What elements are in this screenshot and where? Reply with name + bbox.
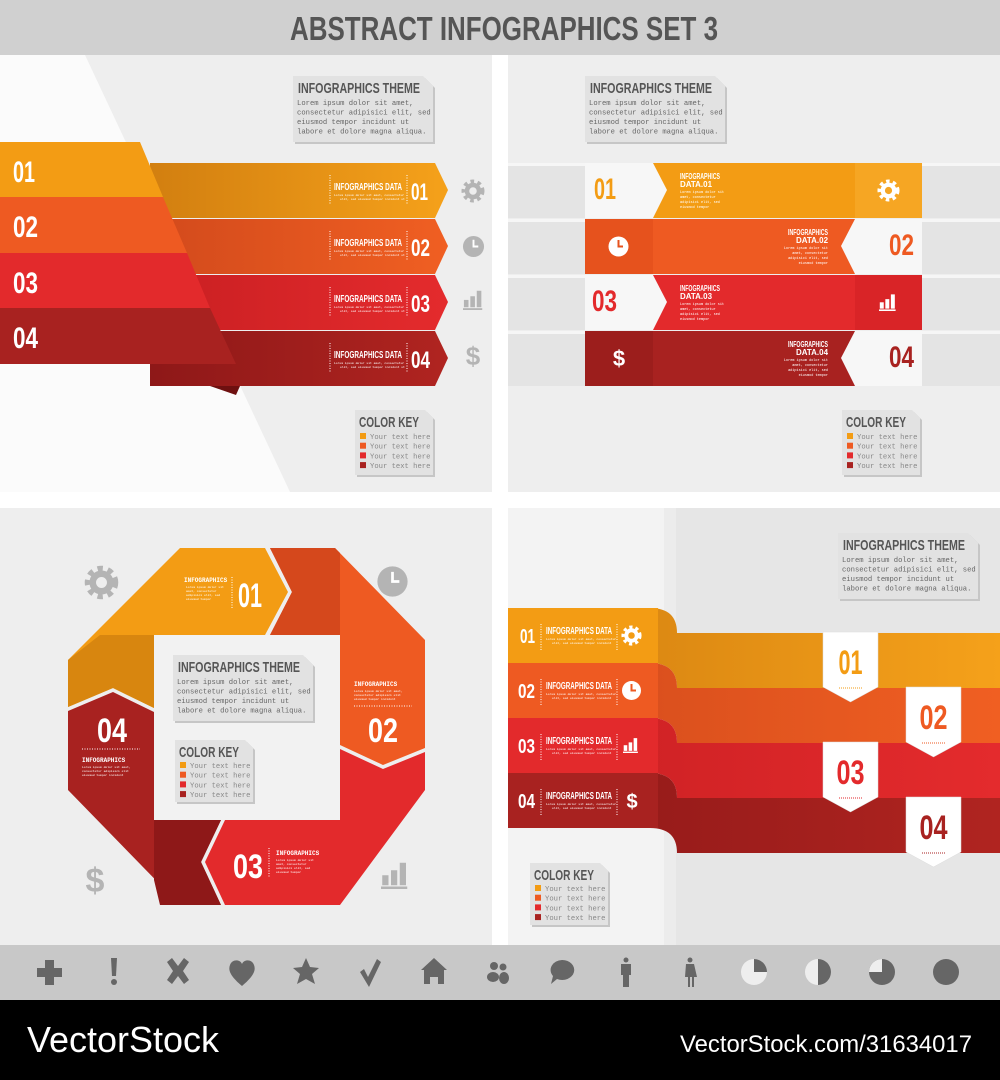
panel: top-right rows bbox=[508, 55, 1000, 492]
data labels: elit, sed eiusmod tempor incidunt ut bbox=[340, 253, 405, 257]
band labels: elit, sed eiusmod tempor incidunt bbox=[552, 751, 612, 755]
theme box: labore et dolore magna aliqua. bbox=[842, 586, 971, 594]
row 02: 02 bbox=[889, 229, 914, 262]
row 01: Lorem ipsum dolor sit bbox=[680, 190, 724, 195]
footer bbox=[0, 1000, 1000, 1080]
color key: Your text here bbox=[545, 886, 605, 894]
theme box: consectetur adipisici elit, sed bbox=[297, 110, 431, 118]
band labels: 02 bbox=[518, 681, 535, 703]
color key: Your text here bbox=[190, 773, 250, 781]
ribbon bands bbox=[508, 608, 1000, 853]
data labels: 02 bbox=[411, 235, 430, 262]
band labels: $ bbox=[626, 791, 638, 813]
segment 03: amet, consectetur bbox=[276, 863, 307, 866]
color key bbox=[355, 410, 435, 477]
color key: COLOR KEY bbox=[534, 867, 594, 884]
theme box: Lorem ipsum dolor sit amet, bbox=[589, 100, 705, 108]
row 01: DATA.01 bbox=[680, 180, 713, 189]
color key: Your text here bbox=[857, 463, 917, 471]
color key: Your text here bbox=[857, 453, 917, 461]
data labels: elit, sed eiusmod tempor incidunt ut bbox=[340, 365, 405, 369]
left bands: 01 bbox=[13, 156, 35, 189]
band labels: INFOGRAPHICS DATA bbox=[546, 626, 612, 637]
row 02 bbox=[585, 219, 922, 274]
band labels: INFOGRAPHICS DATA bbox=[546, 791, 612, 802]
row 01: 01 bbox=[594, 173, 616, 206]
corner icons: $ bbox=[86, 862, 105, 900]
tags: 02 bbox=[920, 699, 948, 737]
theme box: consectetur adipisici elit, sed bbox=[177, 688, 311, 696]
segment 04: 04 bbox=[97, 712, 127, 750]
segment 02: INFOGRAPHICS bbox=[354, 681, 398, 688]
segment 02: Lorem ipsum dolor sit amet, bbox=[354, 689, 403, 693]
panel: bottom-left octagon bbox=[0, 508, 492, 945]
theme box: Lorem ipsum dolor sit amet, bbox=[842, 557, 958, 565]
pie icons bbox=[741, 959, 959, 985]
color key: Your text here bbox=[190, 792, 250, 800]
row 03: eiusmod tempor bbox=[680, 317, 709, 322]
segment 02: 02 bbox=[368, 712, 398, 750]
theme box bbox=[585, 76, 727, 144]
icon: clock bbox=[608, 236, 628, 256]
segment 02: eiusmod tempor incidunt bbox=[354, 697, 396, 701]
band labels: 03 bbox=[518, 736, 535, 758]
row 01: adipisici elit, sed bbox=[680, 200, 720, 205]
row 01: INFOGRAPHICS bbox=[680, 172, 720, 181]
color key: COLOR KEY bbox=[359, 414, 419, 431]
segment 04: INFOGRAPHICS bbox=[82, 757, 126, 764]
theme box: labore et dolore magna aliqua. bbox=[177, 708, 306, 716]
color key: Your text here bbox=[190, 782, 250, 790]
color key: Your text here bbox=[370, 463, 430, 471]
segment 01: eiusmod tempor bbox=[186, 597, 211, 601]
theme box: eiusmod tempor incidunt ut bbox=[297, 119, 409, 127]
row 04: Lorem ipsum dolor sit bbox=[784, 358, 828, 363]
row 03 bbox=[585, 275, 922, 330]
row 01: amet, consectetur bbox=[680, 195, 716, 200]
row 04 bbox=[585, 331, 922, 386]
band labels: elit, sed eiusmod tempor incidunt bbox=[552, 696, 612, 700]
row 01 bbox=[585, 163, 922, 218]
data labels: elit, sed eiusmod tempor incidunt ut bbox=[340, 309, 405, 313]
band labels: Lorem ipsum dolor sit amet, consectetur bbox=[546, 802, 616, 806]
segment 03: Lorem ipsum dolor sit bbox=[276, 858, 314, 862]
theme box bbox=[173, 655, 315, 723]
segment 03: adipisici elit, sed bbox=[276, 866, 310, 870]
theme box: labore et dolore magna aliqua. bbox=[589, 128, 718, 136]
color key bbox=[842, 410, 922, 477]
left bands: 02 bbox=[13, 211, 38, 244]
row 02: Lorem ipsum dolor sit bbox=[784, 246, 828, 251]
row 03: 03 bbox=[592, 285, 617, 318]
color key: Your text here bbox=[545, 905, 605, 913]
segment 03: eiusmod tempor bbox=[276, 870, 301, 874]
data labels: INFOGRAPHICS DATA bbox=[334, 182, 402, 193]
color key: COLOR KEY bbox=[846, 414, 906, 431]
theme box: eiusmod tempor incidunt ut bbox=[589, 119, 701, 127]
segment 04 bbox=[68, 692, 221, 905]
theme box: eiusmod tempor incidunt ut bbox=[177, 698, 289, 706]
segment 01: INFOGRAPHICS bbox=[184, 577, 228, 584]
theme box: labore et dolore magna aliqua. bbox=[297, 128, 426, 136]
color key: Your text here bbox=[857, 444, 917, 452]
color key: Your text here bbox=[370, 453, 430, 461]
row 04: amet, consectetur bbox=[792, 363, 828, 368]
color key bbox=[175, 740, 255, 804]
segment 01: adipisici elit, sed bbox=[186, 593, 220, 597]
theme box: Lorem ipsum dolor sit amet, bbox=[177, 679, 293, 687]
left bands: 04 bbox=[13, 322, 38, 355]
segment 04: Lorem ipsum dolor sit amet, bbox=[82, 765, 131, 769]
color key: COLOR KEY bbox=[179, 744, 239, 761]
row 03: amet, consectetur bbox=[680, 307, 716, 312]
band labels: Lorem ipsum dolor sit amet, consectetur bbox=[546, 747, 616, 751]
band labels: INFOGRAPHICS DATA bbox=[546, 736, 612, 747]
color key: Your text here bbox=[370, 434, 430, 442]
left bands bbox=[0, 142, 236, 364]
data labels bbox=[330, 175, 430, 374]
theme box: INFOGRAPHICS THEME bbox=[298, 80, 420, 97]
row 03: DATA.03 bbox=[680, 292, 713, 301]
row 02: amet, consectetur bbox=[792, 251, 828, 256]
row 04: DATA.04 bbox=[796, 348, 829, 357]
data labels: Lorem ipsum dolor sit amet, consectetur bbox=[334, 361, 404, 365]
band labels bbox=[518, 624, 641, 815]
icon bar bbox=[0, 945, 1000, 1000]
side icons bbox=[463, 182, 484, 371]
row 03: INFOGRAPHICS bbox=[680, 284, 720, 293]
data labels: Lorem ipsum dolor sit amet, consectetur bbox=[334, 305, 404, 309]
segment 03 bbox=[205, 749, 425, 905]
theme box: Lorem ipsum dolor sit amet, bbox=[297, 100, 413, 108]
footer: VectorStock.com/31634017 bbox=[680, 1031, 972, 1058]
tags bbox=[823, 632, 961, 867]
band labels: Lorem ipsum dolor sit amet, consectetur bbox=[546, 692, 616, 696]
tags: 04 bbox=[920, 809, 948, 847]
data labels: elit, sed eiusmod tempor incidunt ut bbox=[340, 197, 405, 201]
panel: top-left ribbon bbox=[0, 55, 492, 492]
segment 02: consectetur adipisici elit bbox=[354, 693, 401, 697]
row 04: adipisici elit, sed bbox=[788, 368, 828, 373]
segment 02 bbox=[270, 548, 425, 765]
arrows right bbox=[150, 163, 448, 395]
segment 01: 01 bbox=[238, 577, 262, 615]
row 04: eiusmod tempor bbox=[799, 373, 828, 378]
theme box bbox=[838, 533, 980, 601]
band labels: 01 bbox=[520, 626, 535, 648]
segment 01: Lorem ipsum dolor sit bbox=[186, 585, 224, 589]
data labels: 01 bbox=[411, 179, 428, 206]
band labels: INFOGRAPHICS DATA bbox=[546, 681, 612, 692]
theme box: INFOGRAPHICS THEME bbox=[590, 80, 712, 97]
data labels: 04 bbox=[411, 347, 430, 374]
band labels: Lorem ipsum dolor sit amet, consectetur bbox=[546, 637, 616, 641]
color key: Your text here bbox=[545, 896, 605, 904]
band labels: elit, sed eiusmod tempor incidunt bbox=[552, 641, 612, 645]
data labels: Lorem ipsum dolor sit amet, consectetur bbox=[334, 193, 404, 197]
segment 04: consectetur adipisici elit bbox=[82, 769, 129, 773]
theme box: INFOGRAPHICS THEME bbox=[178, 659, 300, 676]
data labels: Lorem ipsum dolor sit amet, consectetur bbox=[334, 249, 404, 253]
row 03: Lorem ipsum dolor sit bbox=[680, 302, 724, 307]
left bands: 03 bbox=[13, 267, 38, 300]
color key bbox=[530, 863, 610, 927]
theme box bbox=[293, 76, 435, 144]
row 03: adipisici elit, sed bbox=[680, 312, 720, 317]
panel: bottom-right ribbons bbox=[508, 508, 1000, 945]
row 04: 04 bbox=[889, 341, 914, 374]
theme box: consectetur adipisici elit, sed bbox=[842, 566, 976, 574]
segment 04: eiusmod tempor incidunt bbox=[82, 773, 124, 777]
band labels: elit, sed eiusmod tempor incidunt bbox=[552, 806, 612, 810]
row 04: INFOGRAPHICS bbox=[788, 340, 828, 349]
segment 03: INFOGRAPHICS bbox=[276, 850, 320, 857]
row 02: DATA.02 bbox=[796, 236, 829, 245]
footer: VectorStock bbox=[27, 1019, 220, 1060]
data labels: 03 bbox=[411, 291, 430, 318]
data labels: INFOGRAPHICS DATA bbox=[334, 294, 402, 305]
color key: Your text here bbox=[545, 915, 605, 923]
color key: Your text here bbox=[190, 763, 250, 771]
header bbox=[0, 0, 1000, 55]
tags: 01 bbox=[838, 644, 862, 682]
data labels: INFOGRAPHICS DATA bbox=[334, 238, 402, 249]
title: ABSTRACT INFOGRAPHICS SET 3 bbox=[290, 10, 718, 47]
row 02: eiusmod tempor bbox=[799, 261, 828, 266]
theme box: eiusmod tempor incidunt ut bbox=[842, 576, 954, 584]
row 01: eiusmod tempor bbox=[680, 205, 709, 210]
data labels: INFOGRAPHICS DATA bbox=[334, 350, 402, 361]
corner icons bbox=[86, 566, 408, 900]
theme box: consectetur adipisici elit, sed bbox=[589, 110, 723, 118]
color key: Your text here bbox=[370, 444, 430, 452]
tags: 03 bbox=[836, 754, 864, 792]
band labels: 04 bbox=[518, 791, 536, 813]
side icons: $ bbox=[466, 341, 481, 371]
color key: Your text here bbox=[857, 434, 917, 442]
segment 01 bbox=[68, 548, 288, 708]
segment 01: amet, consectetur bbox=[186, 590, 217, 593]
row 02: adipisici elit, sed bbox=[788, 256, 828, 261]
segment 03: 03 bbox=[233, 848, 263, 886]
row 04: $ bbox=[613, 346, 625, 371]
row 02: INFOGRAPHICS bbox=[788, 228, 828, 237]
